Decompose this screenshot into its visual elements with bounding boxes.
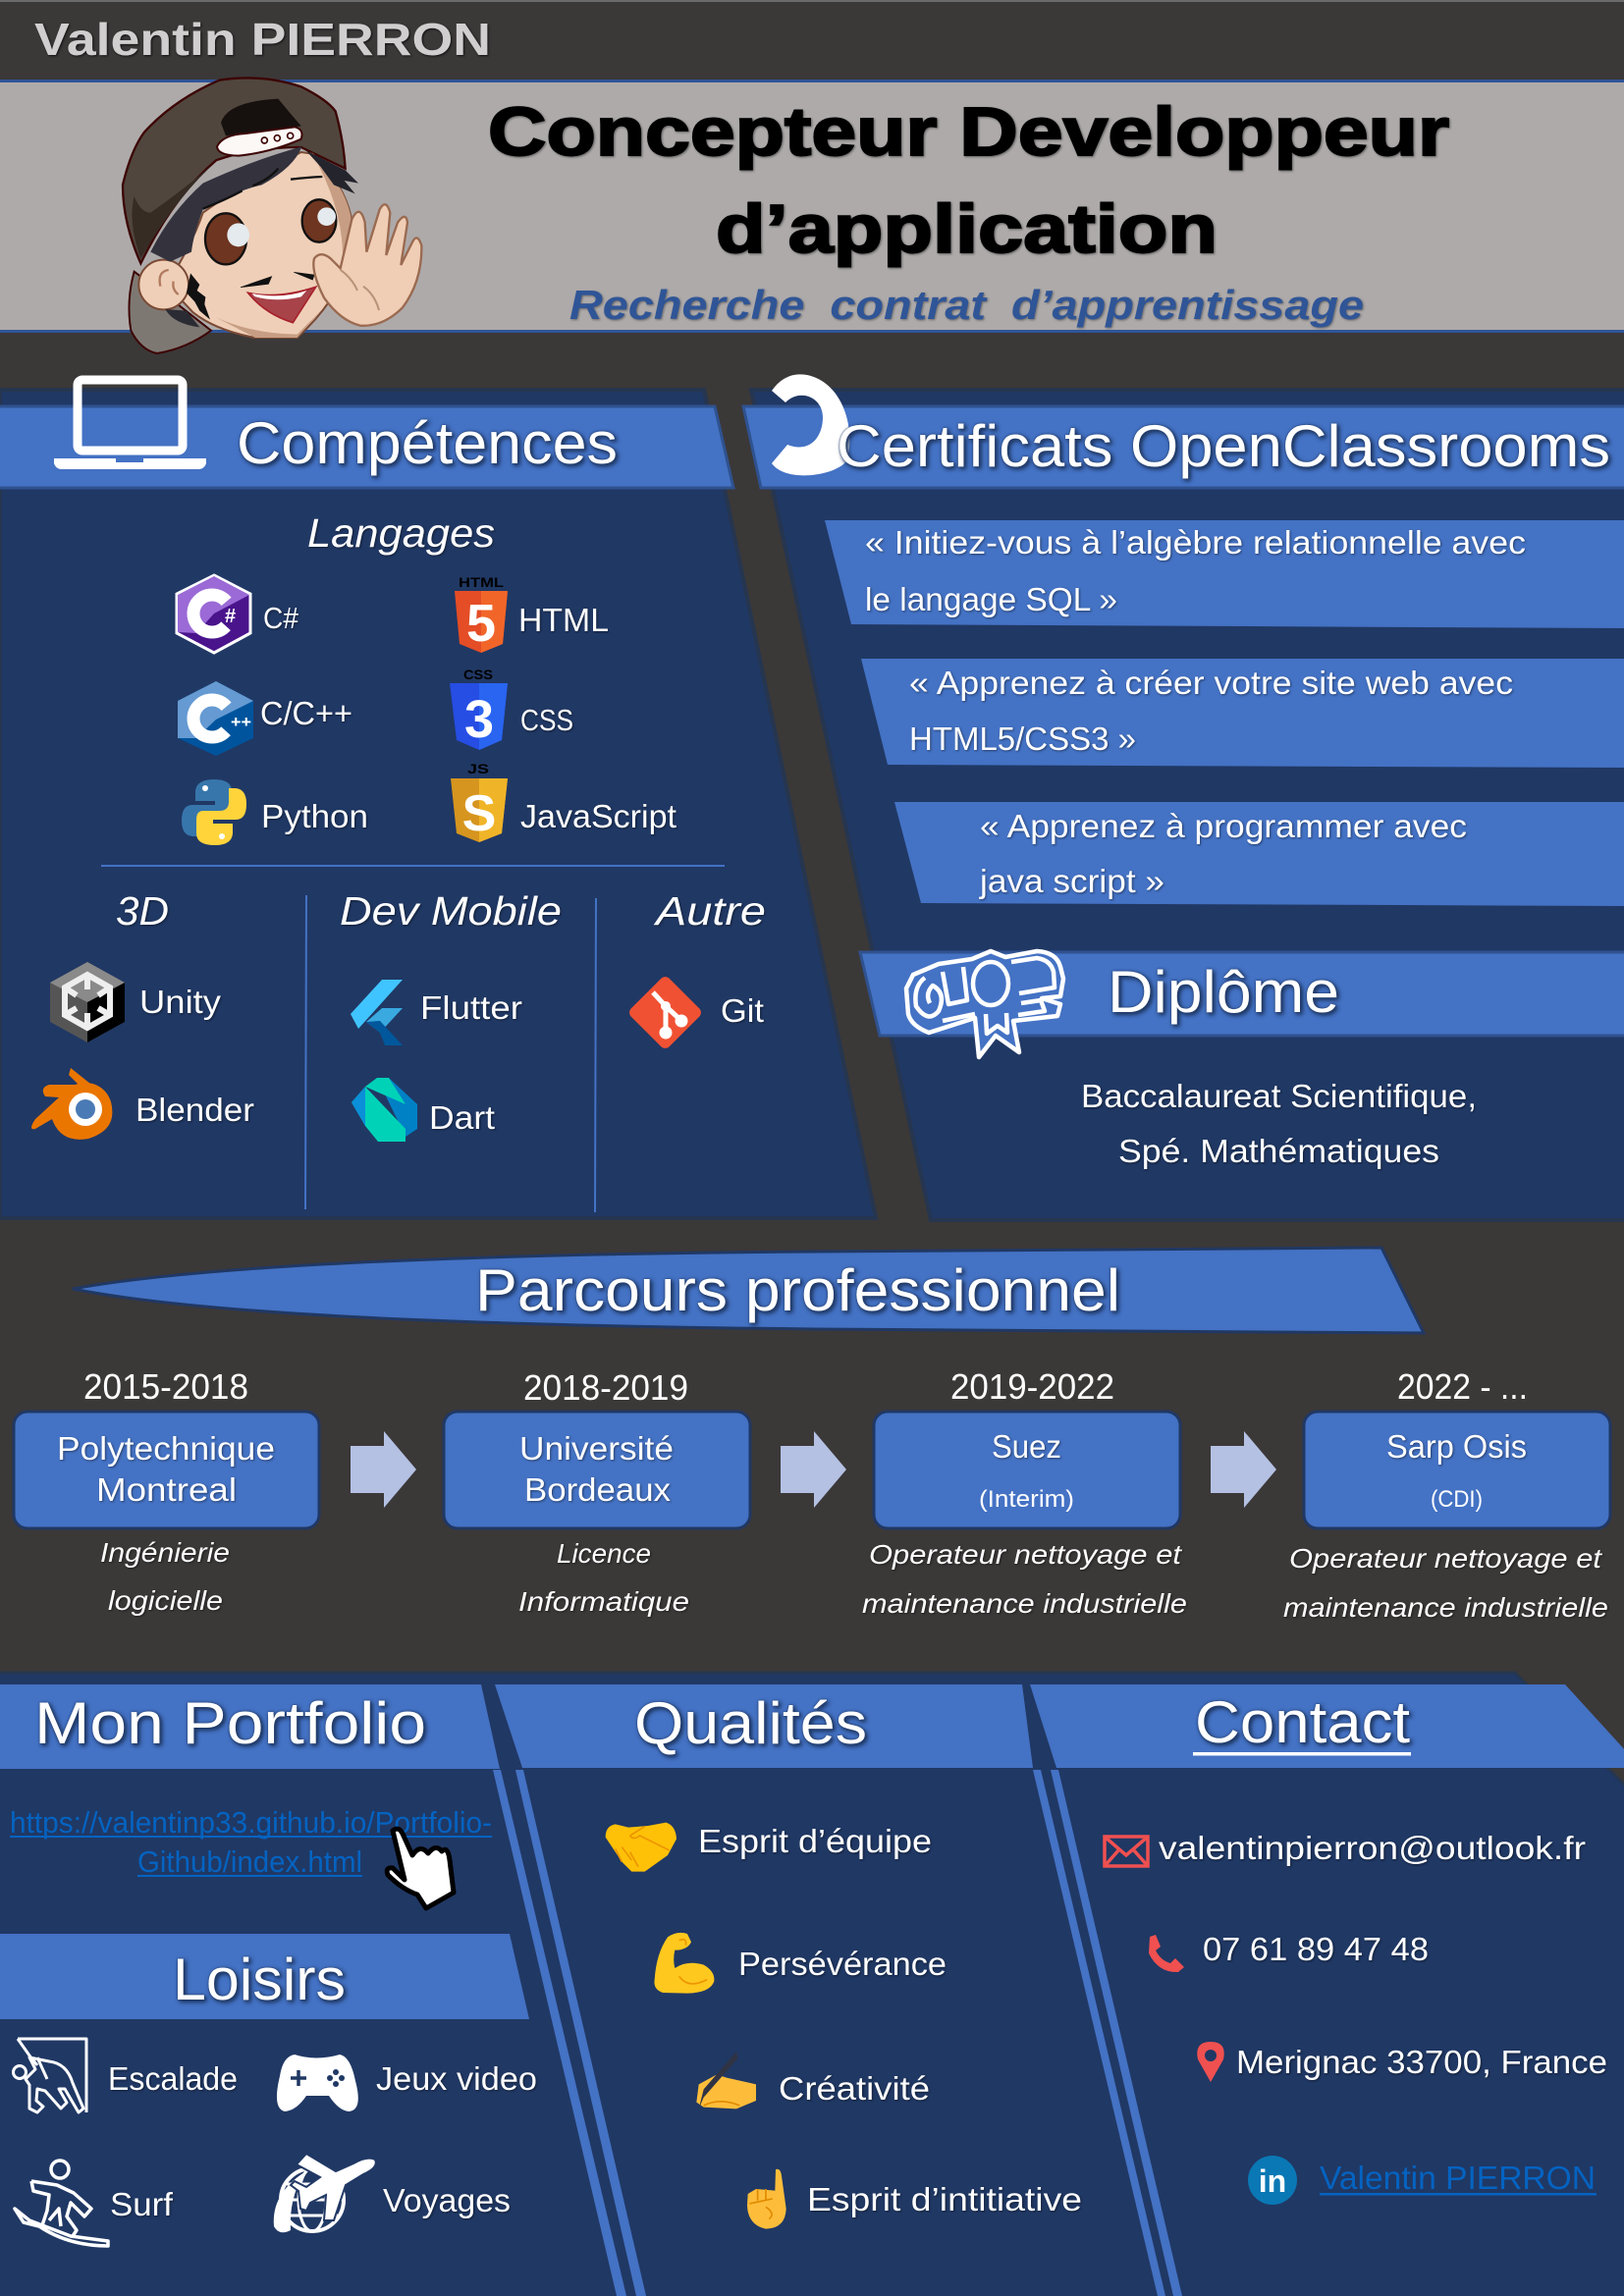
timeline step 4 — [1283, 1366, 1610, 1623]
label: esprit d'équipe: Esprit d’équipe — [698, 1823, 932, 1859]
timeline step 2: Informatique — [518, 1586, 689, 1617]
text: email: valentinpierron@outlook.fr — [1159, 1830, 1586, 1866]
timeline step 3: Suez — [992, 1428, 1061, 1465]
timeline step 3: Operateur nettoyage et — [869, 1539, 1182, 1570]
label: JavaScript: JavaScript — [520, 798, 677, 834]
icon: CSS3 — [450, 667, 508, 750]
timeline step 3 — [862, 1366, 1187, 1619]
certificate 3: java script » — [979, 863, 1164, 899]
icon: JavaScript: S — [462, 785, 496, 842]
title: d’application — [716, 190, 1218, 267]
timeline step 4: Operateur nettoyage et — [1289, 1543, 1602, 1574]
icon: JavaScript — [451, 761, 508, 842]
label: esprit d'initiative: Esprit d’intitiative — [807, 2181, 1082, 2217]
banner: loisirs — [0, 1934, 529, 2019]
heading: 3D: 3D — [116, 888, 169, 934]
label: CSS: CSS — [520, 703, 573, 737]
timeline step 2: Licence — [557, 1538, 651, 1569]
title — [488, 93, 1449, 267]
certificate 2 — [861, 659, 1624, 768]
icon: C++ — [178, 681, 253, 756]
icon: hand cursor — [387, 1829, 454, 1908]
link: linkedin: Valentin PIERRON — [1320, 2160, 1596, 2196]
timeline step 4: maintenance industrielle — [1283, 1592, 1608, 1623]
icon: flexed arm — [654, 1933, 714, 1994]
icon: laptop — [54, 380, 206, 469]
certificate 1: « Initiez-vous à l’algèbre relationnelle avec — [865, 524, 1526, 561]
text: diploma name: Spé. Mathématiques — [1118, 1133, 1439, 1169]
icon: HTML5 — [455, 574, 508, 653]
label: voyages: Voyages — [383, 2182, 511, 2218]
icon: linkedin: in — [1259, 2163, 1286, 2199]
icon: HTML5: HTML — [459, 574, 505, 590]
label: Unity: Unity — [139, 984, 222, 1020]
timeline step 2: 2018-2019 — [523, 1367, 688, 1408]
portfolio link: https://valentinp33.github.io/Portfolio- — [10, 1805, 492, 1840]
icon: OpenClassrooms crescent — [772, 374, 849, 475]
timeline step 1: Polytechnique — [57, 1430, 275, 1467]
icon: surfer — [15, 2161, 108, 2246]
heading: mon portfolio: Mon Portfolio — [34, 1690, 426, 1756]
timeline step 2: Bordeaux — [524, 1471, 672, 1508]
label: Blender: Blender — [135, 1092, 254, 1128]
panel: bottom section — [0, 1673, 1624, 2296]
timeline step 3: (Interim) — [979, 1486, 1074, 1513]
icon: handshake — [606, 1823, 677, 1872]
timeline step 3: 2019-2022 — [950, 1366, 1114, 1407]
timeline step 3: maintenance industrielle — [862, 1588, 1187, 1619]
timeline step 1: Ingénierie — [100, 1537, 230, 1568]
timeline step 4: (CDI) — [1431, 1486, 1483, 1513]
certificate 2: HTML5/CSS3 » — [909, 721, 1136, 757]
label: Flutter: Flutter — [420, 989, 522, 1026]
subtitle: Recherche contrat d’apprentissage — [569, 282, 1364, 328]
certificate 3 — [894, 802, 1624, 906]
icon: C# — [177, 575, 250, 653]
label: Git: Git — [721, 992, 764, 1029]
label: créativité: Créativité — [779, 2070, 930, 2107]
timeline step 2 — [444, 1367, 750, 1617]
portfolio link — [10, 1805, 492, 1879]
heading: qualités: Qualités — [634, 1690, 867, 1756]
icon: JavaScript: JS — [467, 761, 489, 776]
text: diploma name — [1081, 1078, 1477, 1169]
icon: phone — [1149, 1935, 1184, 1972]
icon: globe and plane — [274, 2154, 376, 2232]
icon: writing hand — [696, 2052, 756, 2109]
text: phone: 07 61 89 47 48 — [1203, 1931, 1429, 1967]
icon: Unity — [50, 962, 125, 1042]
timeline step 1: logicielle — [108, 1585, 223, 1616]
icon: Git — [627, 975, 703, 1050]
arrow 3 — [1211, 1431, 1276, 1508]
icon: linkedin — [1248, 2156, 1297, 2205]
banner: diplôme — [860, 952, 1624, 1036]
certificate 1 — [825, 520, 1624, 628]
icon: climbing — [14, 2039, 86, 2112]
certificate 3: « Apprenez à programmer avec — [980, 808, 1467, 844]
heading: Autre: Autre — [653, 888, 766, 934]
icon: Flutter — [351, 980, 403, 1045]
timeline step 4: 2022 - ... — [1397, 1366, 1528, 1407]
icon: gamepad — [277, 2055, 358, 2111]
heading: contact: Contact — [1195, 1689, 1410, 1755]
icon: Dart — [352, 1078, 417, 1142]
timeline step 1: 2015-2018 — [83, 1366, 248, 1407]
icon: CSS3: CSS — [463, 667, 493, 682]
name heading: Valentin PIERRON — [34, 14, 491, 65]
label: surf: Surf — [110, 2186, 174, 2222]
arrow 2 — [781, 1431, 846, 1508]
label: Dart: Dart — [429, 1099, 495, 1136]
timeline step 2: Université — [519, 1430, 674, 1467]
icon: avatar — [123, 78, 421, 353]
heading: langages: Langages — [307, 510, 495, 556]
text: address: Merignac 33700, France — [1236, 2044, 1607, 2080]
portfolio link: Github/index.html — [137, 1844, 362, 1879]
label: escalade: Escalade — [108, 2060, 238, 2097]
label: HTML: HTML — [518, 602, 609, 638]
arrow 1 — [351, 1431, 416, 1508]
icon: Python — [182, 779, 246, 845]
icon: CSS3: 3 — [464, 690, 494, 749]
label: Python: Python — [261, 798, 368, 834]
icon: HTML5: 5 — [466, 594, 496, 653]
label: C/C++: C/C++ — [260, 695, 352, 731]
timeline step 4: Sarp Osis — [1386, 1428, 1527, 1465]
icon: diploma scroll — [906, 951, 1063, 1057]
heading: Dev Mobile: Dev Mobile — [340, 888, 562, 934]
banner: qualités — [495, 1684, 1033, 1768]
timeline step 1 — [14, 1366, 319, 1616]
banner: contact — [1030, 1684, 1624, 1768]
icon: C#: # — [225, 606, 236, 627]
icon: location pin — [1197, 2042, 1224, 2082]
heading: diplôme: Diplôme — [1108, 959, 1339, 1025]
banner: compétences — [0, 406, 733, 488]
banner: parcours professionnel — [73, 1248, 1424, 1333]
panel: compétences — [0, 380, 876, 1218]
banner: certificats — [743, 406, 1624, 488]
icon: C++: ++ — [231, 713, 251, 731]
banner: mon portfolio — [0, 1684, 500, 1769]
icon: envelope — [1105, 1837, 1148, 1866]
label: persévérance: Persévérance — [738, 1946, 947, 1982]
title: Concepteur Developpeur — [488, 93, 1449, 170]
heading: compétences: Compétences — [237, 410, 618, 476]
heading: certificats: Certificats OpenClassrooms — [837, 413, 1610, 479]
header band — [0, 80, 1624, 333]
text: diploma name: Baccalaureat Scientifique, — [1081, 1078, 1477, 1114]
heading: loisirs: Loisirs — [173, 1947, 346, 2012]
icon: Blender — [31, 1068, 112, 1140]
certificate 2: « Apprenez à créer votre site web avec — [909, 665, 1513, 701]
certificate 1: le langage SQL » — [865, 581, 1117, 617]
icon: index pointing up — [747, 2169, 786, 2229]
panel: certificats and diplôme — [743, 374, 1624, 1220]
label: jeux video: Jeux video — [376, 2060, 537, 2097]
banner: parcours professionnel: Parcours professionnel — [475, 1257, 1120, 1323]
timeline step 1: Montreal — [96, 1471, 237, 1508]
label: C#: C# — [263, 601, 299, 635]
